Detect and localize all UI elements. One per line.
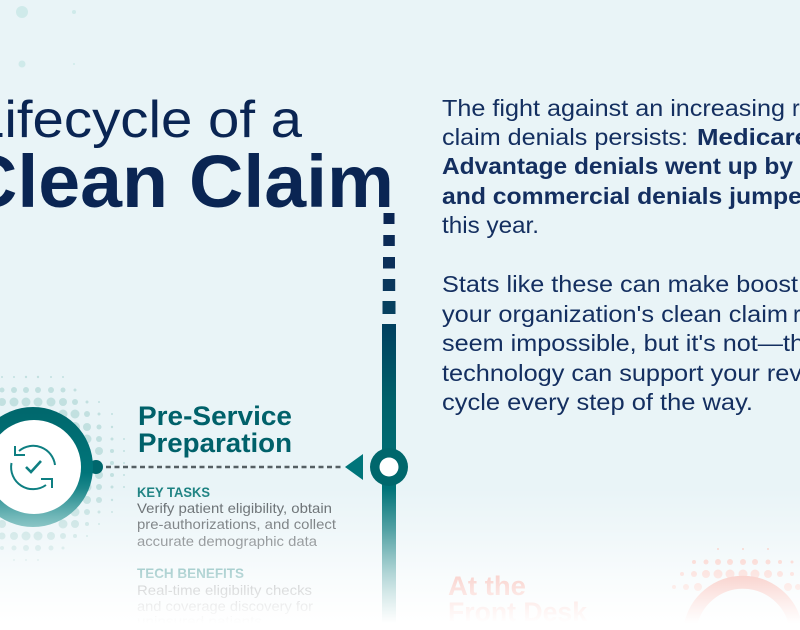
heading: at the front desk: Front Desk [448, 597, 588, 627]
intro paragraph two: your organization's clean claim [442, 301, 788, 327]
intro paragraph one: r [792, 95, 800, 121]
dashed timeline start [382, 213, 396, 314]
intro paragraph two [442, 271, 800, 415]
intro paragraph one [442, 95, 800, 238]
intro paragraph one: Advantage denials went up by [442, 153, 793, 179]
intro paragraph one: The fight against an increasing [442, 95, 785, 121]
heading: pre-service preparation [138, 401, 292, 458]
halftone dots: front desk [672, 548, 800, 591]
intro paragraph one: claim denials persists: [442, 124, 688, 150]
text block: tech benefits: uninsured patients [137, 613, 262, 629]
intro paragraph two: seem impossible, but it's not—th [442, 330, 800, 356]
heading: pre-service preparation: Preparation [138, 428, 292, 458]
timeline line [382, 324, 396, 630]
halftone dots: pre-service [0, 376, 125, 561]
title [0, 91, 394, 223]
top decorative dots [16, 6, 76, 68]
intro paragraph two: technology can support your rev [442, 360, 800, 386]
connector arrowhead [345, 454, 363, 480]
text block: tech benefits: TECH BENEFITS [137, 566, 244, 581]
front desk icon ring [690, 582, 796, 626]
icon: circular arrows with check [11, 446, 55, 489]
heading: pre-service preparation: Pre-Service [138, 401, 292, 431]
text block: tech benefits [137, 566, 313, 629]
text block: key tasks: KEY TASKS [137, 485, 210, 500]
heading: at the front desk [448, 571, 588, 627]
intro paragraph one: Medicare [697, 124, 800, 150]
intro paragraph two: cycle every step of the way. [442, 389, 753, 415]
text block: key tasks: accurate demographic data [137, 533, 317, 549]
heading: at the front desk: At the [448, 571, 526, 601]
bottom white fade [0, 488, 800, 630]
text block: tech benefits: Real-time eligibility checks [137, 582, 312, 598]
text block: key tasks: pre-authorizations, and collect [137, 516, 336, 532]
text block: tech benefits: and coverage discovery for [137, 598, 313, 614]
pre-service icon badge [0, 407, 103, 527]
intro paragraph one: this year. [442, 212, 539, 238]
text block: key tasks [137, 485, 336, 549]
intro paragraph one: and commercial denials jumped [442, 183, 800, 209]
timeline node [370, 448, 408, 486]
connector dotted line [106, 466, 342, 468]
intro paragraph two: Stats like these can make boost [442, 271, 799, 297]
text block: key tasks: Verify patient eligibility, obtain [137, 500, 332, 516]
